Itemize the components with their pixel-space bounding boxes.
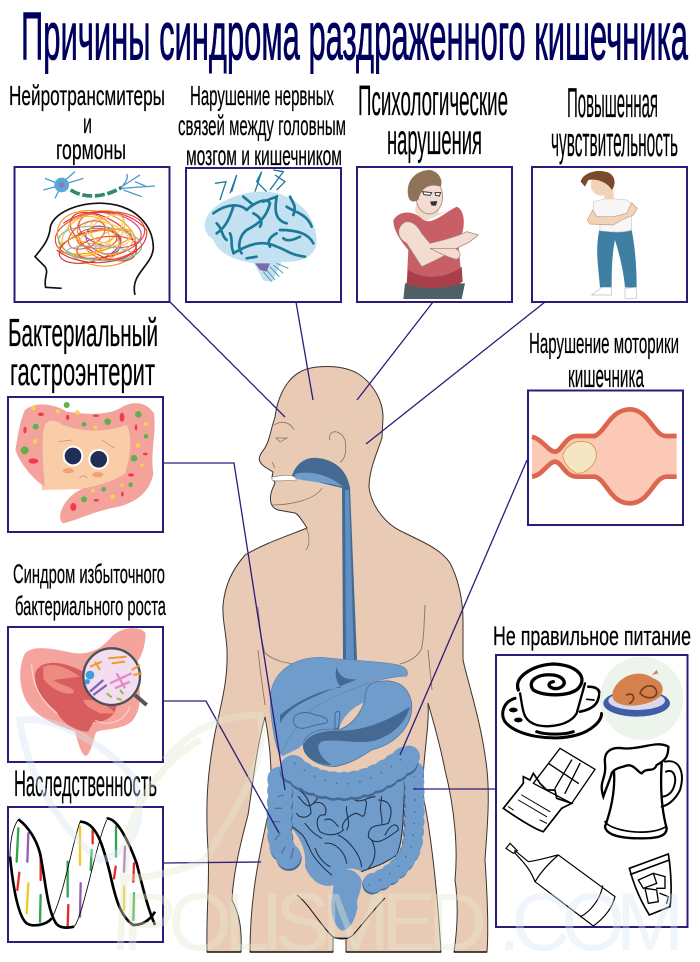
- heading: motility: [529, 328, 679, 394]
- panel: nerve connections brain-gut: [178, 80, 346, 302]
- icon: neuron and tangled head: [35, 172, 155, 295]
- icon: sad inflamed intestine: [15, 402, 155, 523]
- stomach: [303, 681, 412, 767]
- esophagus and mouth: [292, 458, 357, 660]
- human body silhouette: [207, 366, 488, 952]
- icon: chocolate bar: [503, 748, 595, 832]
- icon: bowel with blockage: [532, 409, 677, 503]
- heading: psychological: нарушения: [387, 116, 482, 164]
- heading: bacterial gastroenteritis: Бактериальный: [8, 312, 158, 355]
- panel: heredity: [8, 763, 163, 942]
- heading: neurotransmitters: [9, 80, 165, 165]
- icon: beer mug: [602, 744, 682, 838]
- heading: bacterial gastroenteritis: [8, 312, 158, 394]
- heading: psychological: [358, 77, 508, 164]
- icon: boy holding stomach: [581, 171, 637, 298]
- icon: intestine under magnifier: [20, 628, 147, 756]
- panel: improper diet: [493, 621, 691, 927]
- icon: coffee cup: [503, 664, 602, 738]
- text: Наследственность: [14, 763, 157, 804]
- heading: overgrowth: Синдром избыточного: [13, 559, 165, 589]
- icons: food and drinks: [503, 657, 683, 926]
- icon: bottle: [506, 843, 615, 926]
- sigmoid colon: [331, 870, 362, 931]
- text: Психологические: [358, 77, 508, 125]
- transverse colon: [293, 755, 409, 787]
- heading: neurotransmitters: и: [83, 108, 92, 139]
- icon: brain: [205, 170, 317, 282]
- heading: overgrowth: [13, 559, 167, 621]
- ascending colon: [273, 779, 293, 859]
- heading: neurotransmitters: гормоны: [56, 134, 126, 165]
- icon: roast turkey: [600, 657, 683, 740]
- heading: sensitivity: [551, 79, 678, 165]
- panel: bacterial overgrowth syndrome: [8, 559, 167, 762]
- descending colon: [368, 772, 415, 885]
- panel: neurotransmitters and hormones: [9, 80, 170, 302]
- liver: [275, 680, 372, 757]
- panel: psychological disorders: [357, 77, 512, 302]
- icon: DNA helix: [10, 818, 155, 928]
- panel: bowel motility disorder: [528, 328, 683, 525]
- heading: bacterial gastroenteritis: гастроэнтерит: [10, 351, 155, 394]
- panel: bacterial gastroenteritis: [8, 312, 163, 532]
- heading: overgrowth: бактериального роста: [15, 591, 167, 621]
- panel: increased sensitivity: [532, 79, 687, 302]
- small intestine: [287, 780, 403, 886]
- icon: glass of ice: [629, 854, 671, 915]
- heading: nerve connections: Нарушение нервных: [190, 80, 334, 111]
- icon: frightened man: [393, 170, 478, 299]
- heading: nerve connections: [178, 80, 346, 171]
- gallbladder and duct: [293, 711, 340, 728]
- leader lines: [163, 302, 545, 863]
- watermark: polismed.com: [20, 715, 684, 962]
- heading: nerve connections: связей между головным: [178, 110, 346, 141]
- digestive tract organs: [270, 458, 415, 931]
- heading: neurotransmitters: Нейротрансмитеры: [9, 80, 165, 111]
- heading: nerve connections: мозгом и кишечником: [186, 140, 342, 171]
